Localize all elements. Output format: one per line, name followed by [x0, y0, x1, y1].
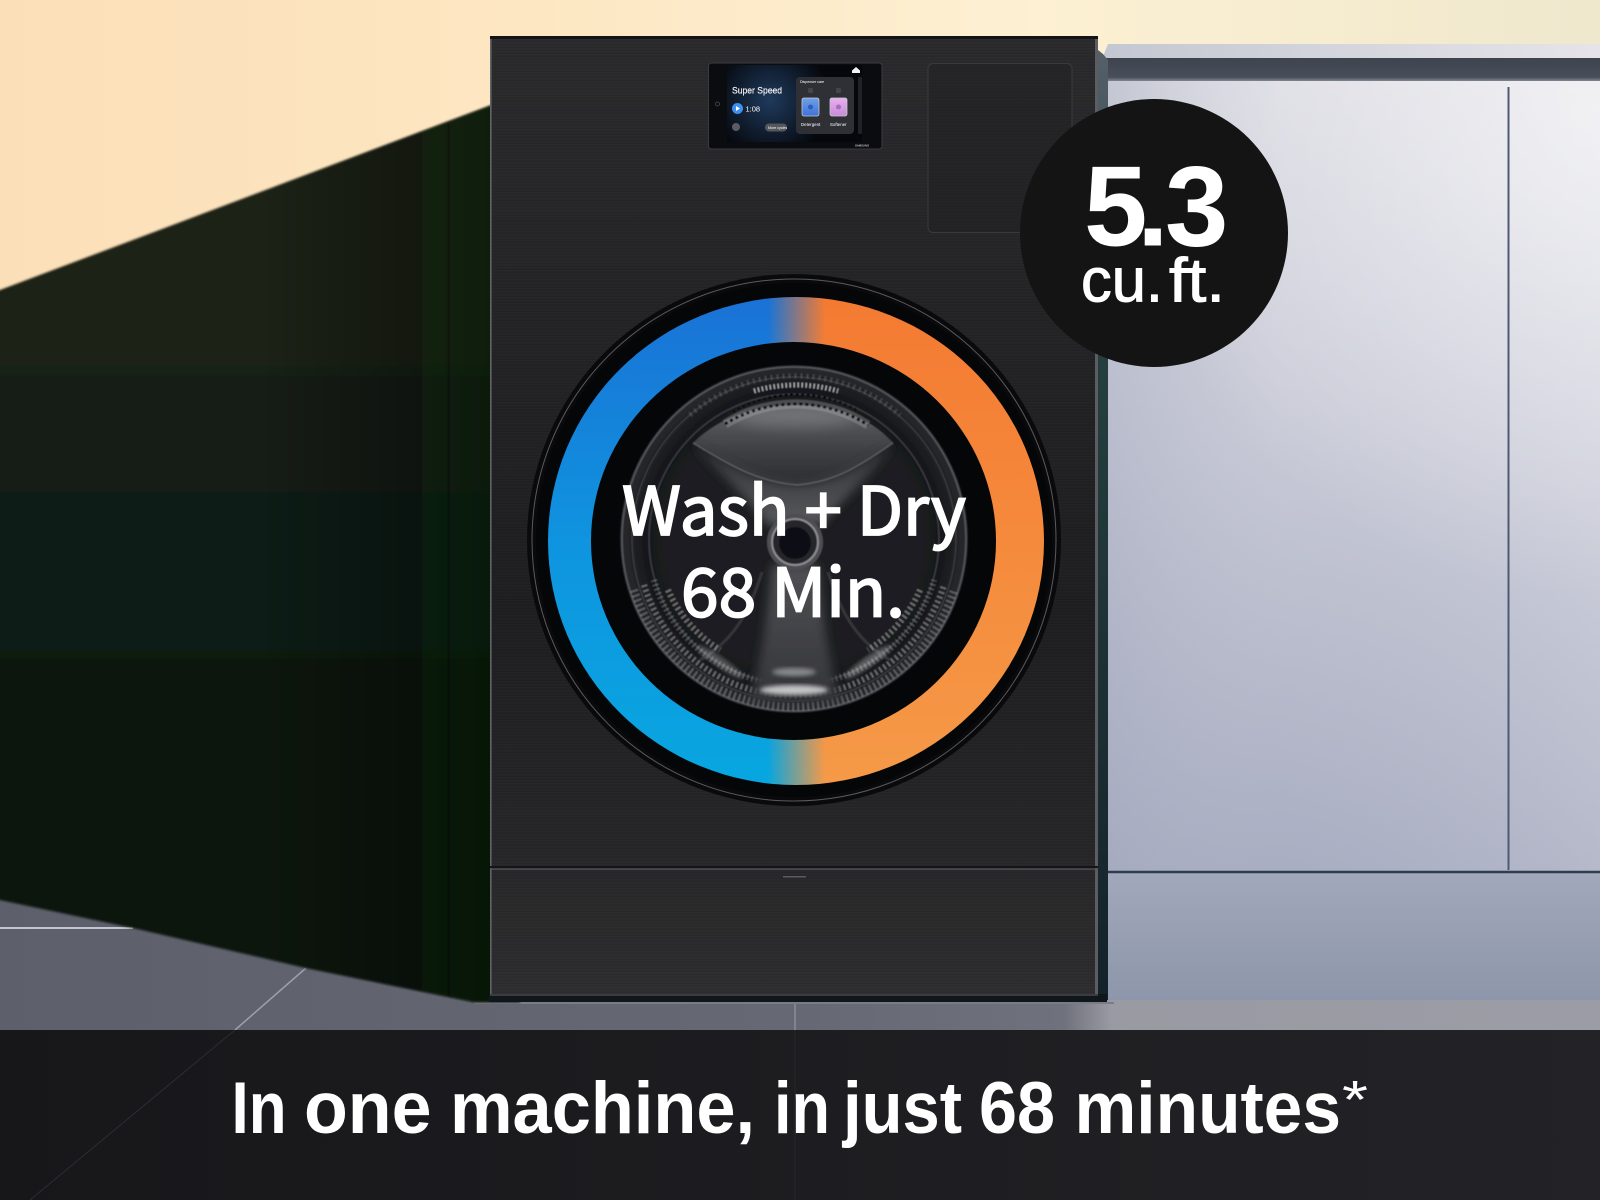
glass highlights	[694, 408, 894, 695]
kick panel	[490, 866, 1098, 878]
glass rims	[622, 367, 966, 711]
drum	[620, 365, 968, 713]
floor	[0, 890, 1600, 1030]
cabinet door panels	[1108, 81, 1600, 872]
side card sliver	[858, 77, 862, 134]
cabinet seam lines	[1106, 87, 1600, 872]
caption text: machine,	[450, 1068, 755, 1149]
footnote asterisk: *	[1342, 1070, 1368, 1130]
washer body	[490, 36, 1098, 996]
cabinet toe kick	[1108, 872, 1600, 1000]
washing machine	[489, 36, 1107, 1002]
play button and timer: 1:08	[746, 104, 760, 114]
door	[527, 274, 1061, 806]
gap beside washer	[1098, 50, 1108, 1000]
screen title: Super Speed	[732, 86, 782, 96]
wash and dry gradient ring	[548, 297, 1044, 785]
door outer ring	[527, 274, 1061, 806]
wall shadow	[0, 96, 520, 1002]
caption text: one	[304, 1068, 432, 1149]
drum spokes	[693, 443, 893, 700]
dispenser care card	[796, 77, 854, 134]
cycle time label: Wash + Dry	[622, 458, 966, 555]
brand mark: SAMSUNG	[855, 144, 869, 148]
dispenser care card: Detergent	[801, 122, 821, 127]
play button and timer	[732, 103, 760, 114]
drum hub	[767, 514, 823, 570]
upper drum sector	[693, 405, 893, 485]
caption text: just	[841, 1068, 962, 1149]
rear drum wall	[662, 407, 926, 671]
more cycles button: More cycles	[768, 126, 787, 130]
flat access panel	[928, 64, 1072, 232]
capacity number: 5.3	[1084, 144, 1228, 270]
cabinet top strip	[1102, 44, 1600, 59]
drum perforations	[668, 385, 920, 650]
floor tile joints	[0, 928, 1114, 1030]
caption text: minutes	[1074, 1068, 1341, 1149]
cycle time label: 68 Min.	[681, 540, 905, 636]
dispenser care card: Dispenser care	[800, 80, 824, 84]
cycle time label	[622, 458, 966, 636]
caption text: In	[232, 1068, 286, 1149]
display screen	[727, 65, 862, 142]
capacity badge	[1020, 99, 1288, 367]
dispenser care card: Softener	[830, 122, 847, 127]
bar floor reflections	[30, 1030, 795, 1200]
capacity unit: cu.	[1081, 246, 1163, 316]
control display	[708, 63, 882, 149]
more cycles button	[732, 123, 787, 132]
home icon	[852, 67, 860, 73]
display frame	[708, 63, 882, 149]
washer base shadow	[489, 994, 1107, 1002]
caption bar	[0, 1030, 1600, 1200]
caption text: 68	[979, 1068, 1055, 1149]
cabinet	[1098, 44, 1600, 1000]
caption text: in	[774, 1068, 830, 1149]
cabinet shadow band	[1102, 58, 1600, 82]
capacity unit: ft.	[1169, 246, 1225, 316]
